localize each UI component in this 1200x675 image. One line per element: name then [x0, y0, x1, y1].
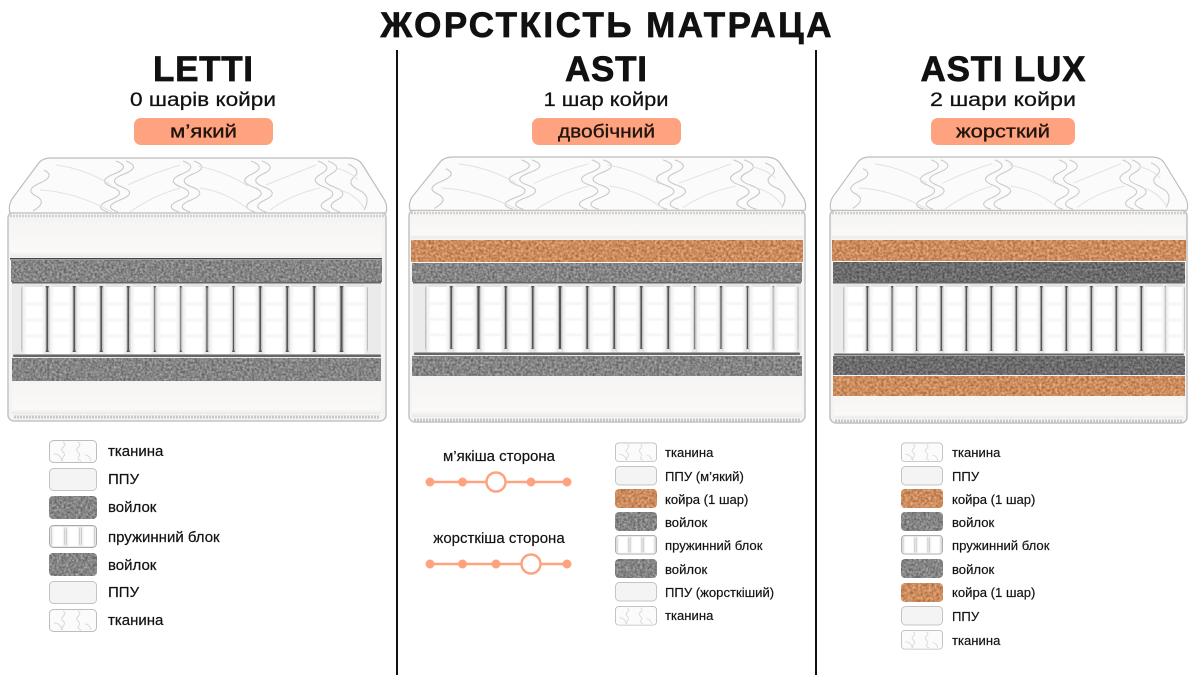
legend: ASTI [615, 443, 774, 625]
legend: ASTI LUX: тканина [952, 633, 1001, 648]
badge: soft: м’який [170, 120, 237, 142]
mattress: LETTI [8, 158, 387, 421]
legend: LETTI: пружинний блок [108, 529, 220, 546]
panel: LETTI [8, 50, 387, 632]
badge: firm [931, 118, 1075, 145]
legend: ASTI: ППУ (жорсткіший) [665, 585, 774, 600]
divider right [815, 50, 817, 675]
legend: ASTI LUX: ППУ [952, 609, 980, 624]
panel: ASTI [409, 50, 806, 625]
legend: ASTI LUX [901, 443, 1050, 649]
legend: LETTI: ППУ [108, 471, 140, 488]
legend: ASTI: ППУ (м’який) [665, 469, 744, 484]
firmness scale: firm side [426, 530, 572, 574]
legend: ASTI: войлок [665, 562, 707, 577]
title: ЖОРСТКІСТЬ МАТРАЦА [380, 6, 832, 45]
legend: ASTI LUX: тканина [952, 445, 1001, 460]
mattress: ASTI [409, 157, 806, 422]
legend: ASTI: войлок [665, 515, 707, 530]
divider left [396, 50, 398, 675]
legend: ASTI LUX: ППУ [952, 469, 980, 484]
subheading: coil layers: 2 шари койри [930, 90, 1076, 111]
panel: ASTI LUX [830, 50, 1188, 649]
legend: ASTI LUX: койра (1 шар) [952, 585, 1035, 600]
legend: ASTI: пружинний блок [665, 538, 763, 553]
badge: firm: жорсткий [956, 120, 1050, 142]
legend: LETTI: тканина [108, 443, 164, 460]
badge: two-sided [532, 118, 681, 145]
legend: LETTI: ППУ [108, 584, 140, 601]
heading: LETTI: LETTI [153, 50, 253, 89]
legend: ASTI LUX: пружинний блок [952, 538, 1050, 553]
subheading: coil layers: 1 шар койри [544, 90, 668, 111]
heading: ASTI: ASTI [565, 50, 647, 89]
legend: ASTI: тканина [665, 608, 714, 623]
legend: LETTI: войлок [108, 557, 157, 574]
badge: two-sided: двобічний [558, 120, 655, 142]
legend: ASTI LUX: войлок [952, 515, 994, 530]
legend: ASTI LUX: войлок [952, 562, 994, 577]
legend: LETTI [49, 440, 220, 632]
mattress: ASTI LUX [830, 157, 1188, 423]
legend: LETTI: тканина [108, 612, 164, 629]
heading: ASTI LUX: ASTI LUX [920, 50, 1086, 89]
legend: ASTI: тканина [665, 445, 714, 460]
firmness scale: soft side: м’якіша сторона [443, 448, 556, 465]
subheading: coil layers: 0 шарів койри [130, 90, 276, 111]
legend: LETTI: войлок [108, 499, 157, 516]
badge: soft [134, 118, 273, 145]
legend: ASTI LUX: койра (1 шар) [952, 492, 1035, 507]
legend: ASTI: койра (1 шар) [665, 492, 748, 507]
firmness scale: firm side: жорсткіша сторона [433, 530, 565, 547]
firmness scale: soft side [426, 448, 572, 492]
